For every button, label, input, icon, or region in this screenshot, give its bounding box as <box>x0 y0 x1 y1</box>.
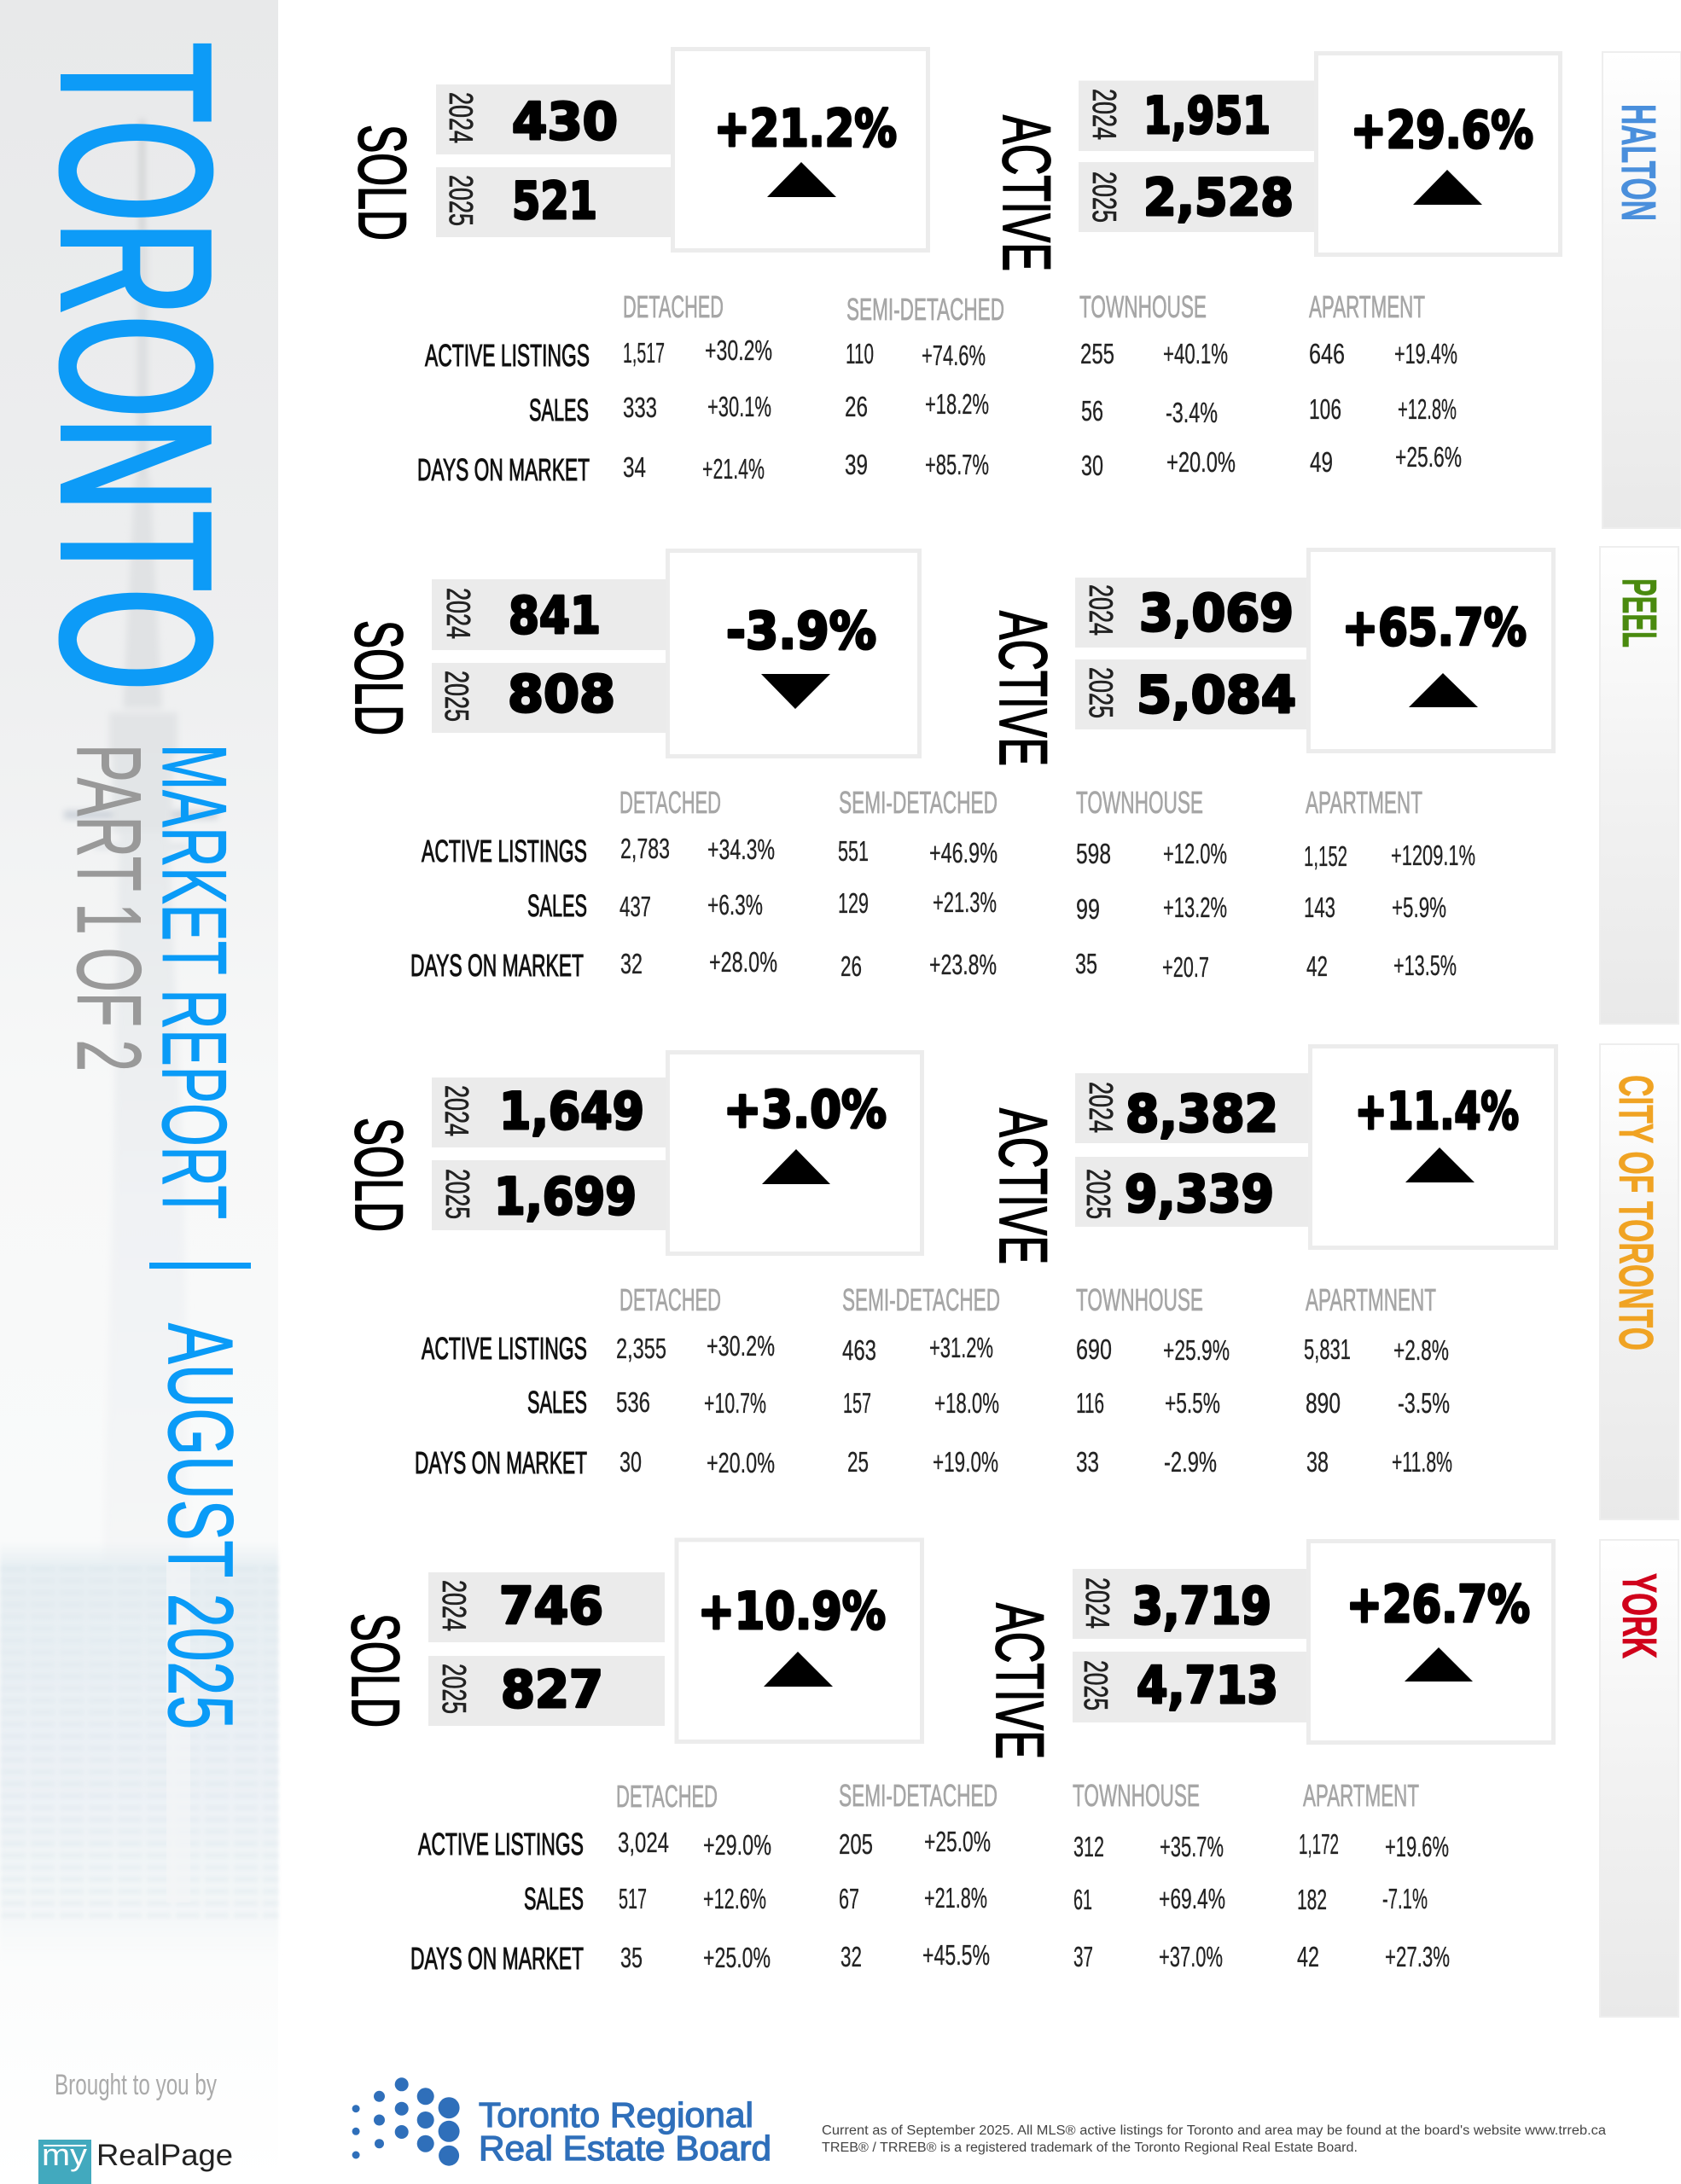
Halton active block <box>989 53 1560 271</box>
logo: myRealPage: my <box>42 2137 87 2172</box>
2024 active bar: 3,719 <box>1132 1577 1271 1636</box>
2025 sold bar: 1,699 <box>494 1167 637 1227</box>
Halton table <box>417 289 1462 487</box>
column headers: SEMI-DETACHED <box>839 785 998 820</box>
row: days on market: 37 <box>1073 1941 1093 1972</box>
row: sales: 437 <box>619 891 651 922</box>
column headers: DETACHED <box>616 1779 718 1814</box>
2025 active bar <box>1079 162 1314 232</box>
column headers: APARTMNENT <box>1306 1282 1436 1317</box>
row: days on market: +23.8% <box>929 949 997 980</box>
row: active listings: 551 <box>838 835 869 867</box>
sold change box: -3.9% <box>726 601 876 661</box>
column headers: APARTMENT <box>1303 1778 1419 1813</box>
Peel region tab <box>1600 547 1678 1024</box>
row: sales: -3.4% <box>1166 397 1218 428</box>
column headers <box>616 1778 1419 1814</box>
2024 active bar: 2024 <box>1079 1577 1115 1629</box>
active label: ACTIVE <box>982 1603 1058 1759</box>
row: active listings: +30.2% <box>707 1330 775 1362</box>
row: active listings: 646 <box>1309 338 1345 369</box>
row: sales: 536 <box>616 1386 650 1418</box>
row: active listings: 255 <box>1080 338 1114 369</box>
row: sales <box>529 388 1457 428</box>
row: active listings: 598 <box>1076 838 1111 869</box>
subtitle: date: AUGUST 2025 <box>149 1323 253 1729</box>
row: days on market: +21.4% <box>702 453 765 485</box>
row: sales: 67 <box>839 1883 859 1914</box>
York sold block <box>338 1540 922 1742</box>
sold change box: +10.9% <box>698 1582 886 1641</box>
2024 active bar <box>1079 80 1314 151</box>
row: sales: +13.2% <box>1163 892 1227 923</box>
row: sales: 99 <box>1076 893 1100 925</box>
row: active listings: +29.0% <box>703 1829 771 1861</box>
row: sales: 157 <box>843 1387 871 1419</box>
2025 sold bar: 2025 <box>442 175 479 226</box>
row: sales: +69.4% <box>1159 1883 1225 1914</box>
row: days on market: +19.0% <box>933 1446 998 1478</box>
sidebar background with faded CN Tower skyline <box>0 0 278 2184</box>
sponsor heading: Brought to you by <box>55 2069 217 2101</box>
row: days on market: 30 <box>1081 450 1103 481</box>
Halton sold block <box>345 49 928 251</box>
2025 active bar: 5,084 <box>1137 665 1296 725</box>
row: days on market: 25 <box>847 1446 869 1478</box>
panel: Halton <box>345 49 1681 528</box>
row: days on market: 33 <box>1076 1446 1099 1478</box>
row: days on market: +20.0% <box>707 1447 775 1478</box>
2024 sold bar: 841 <box>509 586 601 646</box>
row: sales: +6.3% <box>707 889 763 921</box>
row: active listings: +34.3% <box>707 834 775 865</box>
2024 sold bar: 2024 <box>438 1085 474 1136</box>
2024 active bar: 2024 <box>1082 1082 1119 1133</box>
row: active listings: +19.4% <box>1394 338 1457 369</box>
row: sales: 182 <box>1297 1884 1327 1915</box>
row: sales: SALES <box>527 1385 587 1420</box>
row: days on market: 32 <box>620 948 643 979</box>
row: sales: 56 <box>1081 395 1103 427</box>
row: active listings: +31.2% <box>929 1332 993 1363</box>
column headers: TOWNHOUSE <box>1076 785 1203 820</box>
column headers: TOWNHOUSE <box>1076 1282 1203 1317</box>
logo: myRealPage: RealPage <box>96 2139 233 2172</box>
row: active listings: +25.9% <box>1163 1334 1230 1366</box>
row: sales: +5.9% <box>1392 892 1446 923</box>
row: days on market: DAYS ON MARKET <box>415 1445 587 1480</box>
2024 sold bar: 746 <box>499 1577 603 1636</box>
row: sales: 106 <box>1309 393 1341 425</box>
2025 sold bar: 2025 <box>438 671 474 722</box>
2024 sold bar <box>432 579 666 650</box>
row: active listings <box>418 1826 1449 1862</box>
row: days on market: 32 <box>840 1941 862 1972</box>
row: days on market: 42 <box>1306 950 1328 982</box>
row: active listings: +35.7% <box>1160 1831 1224 1862</box>
column headers: SEMI-DETACHED <box>839 1778 998 1813</box>
row: sales <box>524 1881 1428 1916</box>
disclaimer text: Current as of September 2025. All MLS® active listings for Toronto and area may be found at the board's website www.trreb.ca <box>822 2123 1606 2138</box>
row: days on market: +11.8% <box>1392 1446 1452 1478</box>
row: sales: +12.8% <box>1398 393 1457 425</box>
row: days on market: +13.5% <box>1393 950 1457 981</box>
City of Toronto region tab: CITY OF TORONTO <box>1608 1075 1663 1350</box>
2025 sold bar <box>428 1656 665 1726</box>
2024 active bar: 2024 <box>1085 89 1122 140</box>
2024 sold bar: 430 <box>512 92 618 152</box>
row: days on market: 30 <box>619 1446 642 1478</box>
2025 sold bar <box>436 167 671 237</box>
row: active listings: +2.8% <box>1393 1334 1449 1366</box>
2025 active bar: 4,713 <box>1137 1656 1278 1716</box>
row: sales: 143 <box>1304 892 1335 923</box>
row: active listings: 463 <box>842 1334 876 1366</box>
sold change box <box>672 49 928 251</box>
active label: ACTIVE <box>989 115 1065 271</box>
row: days on market: 26 <box>840 950 862 982</box>
row: days on market <box>410 946 1457 983</box>
row: active listings: +1209.1% <box>1391 839 1475 871</box>
2024 active bar <box>1075 1073 1309 1144</box>
row: active listings: +46.9% <box>929 837 998 868</box>
panel: sidebar <box>0 0 278 2184</box>
row: sales: SALES <box>529 392 589 427</box>
sold change box: +3.0% <box>724 1080 887 1140</box>
panel: York <box>338 1540 1678 2017</box>
row: days on market: DAYS ON MARKET <box>417 452 590 487</box>
panel: Peel <box>341 547 1678 1024</box>
row: active listings: 2,355 <box>616 1333 666 1364</box>
column headers: DETACHED <box>623 289 724 324</box>
row: sales: +21.8% <box>924 1882 987 1914</box>
row: active listings: 5,831 <box>1304 1333 1351 1365</box>
2025 sold bar <box>432 1160 666 1230</box>
2025 sold bar: 808 <box>508 665 615 724</box>
row: sales: 61 <box>1073 1884 1092 1915</box>
sold change box <box>667 551 920 756</box>
row: active listings: +74.6% <box>922 340 986 371</box>
row: days on market <box>415 1445 1452 1480</box>
sold label: SOLD <box>341 620 417 735</box>
row: active listings: 110 <box>846 338 874 369</box>
row: sales: SALES <box>527 888 587 923</box>
row: days on market: 39 <box>845 449 868 480</box>
row: active listings <box>422 1330 1449 1366</box>
Peel region tab: PEEL <box>1612 578 1666 648</box>
Halton region tab: HALTON <box>1611 104 1666 221</box>
2024 active bar <box>1075 578 1311 648</box>
2024 sold bar <box>432 1077 666 1147</box>
2024 sold bar: 2024 <box>442 92 479 143</box>
2025 active bar: 2025 <box>1082 667 1119 718</box>
row: sales <box>527 886 1446 925</box>
York region tab <box>1600 1540 1678 2017</box>
row: sales: +30.1% <box>707 391 771 422</box>
row: sales: 333 <box>623 392 657 423</box>
sold change box <box>667 1053 922 1254</box>
2025 sold bar: 2025 <box>435 1664 472 1714</box>
row: sales: +5.5% <box>1165 1387 1220 1419</box>
row: active listings: +25.0% <box>924 1826 991 1857</box>
active change box: +29.6% <box>1351 101 1533 160</box>
row: active listings: +19.6% <box>1385 1831 1449 1862</box>
2024 active bar: 8,382 <box>1126 1084 1278 1144</box>
row: days on market: +25.6% <box>1395 441 1462 473</box>
Peel sold block <box>341 551 920 756</box>
row: days on market: +27.3% <box>1385 1941 1450 1972</box>
disclaimer text <box>822 2123 1606 2155</box>
column headers <box>619 785 1422 820</box>
row: active listings: +30.2% <box>705 334 772 366</box>
title: TORONTO: TORONTO <box>15 43 258 690</box>
row: sales: 517 <box>619 1883 647 1914</box>
2024 sold bar: 1,649 <box>499 1082 644 1141</box>
active change box: +26.7% <box>1347 1575 1530 1635</box>
2025 active bar: 2025 <box>1077 1660 1114 1711</box>
City of Toronto region tab <box>1600 1044 1678 1519</box>
row: days on market: 38 <box>1306 1446 1329 1478</box>
row: days on market: 34 <box>623 451 646 483</box>
City table <box>415 1282 1452 1480</box>
column headers: SEMI-DETACHED <box>846 292 1004 327</box>
Peel table <box>410 785 1475 983</box>
row: sales: 116 <box>1076 1387 1104 1419</box>
row: active listings: 1,172 <box>1299 1828 1339 1860</box>
City active block <box>986 1046 1556 1264</box>
row: active listings: ACTIVE LISTINGS <box>418 1827 584 1862</box>
row: active listings: ACTIVE LISTINGS <box>422 1331 587 1366</box>
row: active listings: ACTIVE LISTINGS <box>422 834 587 868</box>
column headers: DETACHED <box>619 1282 721 1317</box>
logo text: Real Estate Board <box>479 2129 771 2168</box>
row: active listings: 205 <box>839 1828 873 1860</box>
logo text <box>479 2095 771 2168</box>
row: sales: -7.1% <box>1382 1883 1428 1914</box>
2025 sold bar: 2025 <box>439 1169 475 1219</box>
disclaimer text: TREB® / TRREB® is a registered trademark of the Toronto Regional Real Estate Board. <box>822 2140 1358 2155</box>
active change box <box>1311 1046 1556 1247</box>
row: days on market: 35 <box>620 1942 643 1973</box>
row: active listings: +12.0% <box>1163 838 1227 869</box>
row: days on market: DAYS ON MARKET <box>410 1941 584 1976</box>
row: active listings: 690 <box>1076 1333 1112 1365</box>
2025 active bar: 2,528 <box>1143 168 1294 228</box>
row: days on market: DAYS ON MARKET <box>410 948 584 983</box>
2024 active bar <box>1073 1569 1306 1639</box>
row: active listings <box>422 833 1475 872</box>
column headers: TOWNHOUSE <box>1079 289 1207 324</box>
active change box <box>1316 53 1560 254</box>
row: sales: +18.2% <box>925 388 989 420</box>
row: days on market: 49 <box>1310 446 1333 478</box>
sold label: SOLD <box>345 125 421 241</box>
divider <box>149 1263 251 1269</box>
2025 active bar: 9,339 <box>1125 1165 1274 1224</box>
column headers <box>619 1282 1436 1317</box>
2024 active bar: 3,069 <box>1139 584 1294 643</box>
York active block <box>982 1541 1553 1759</box>
active change box: +11.4% <box>1355 1082 1519 1141</box>
row: active listings: 312 <box>1073 1831 1104 1862</box>
row: days on market: +28.0% <box>709 946 777 978</box>
York region tab: YORK <box>1612 1573 1666 1658</box>
active change box <box>1309 549 1553 751</box>
row: days on market: 35 <box>1075 948 1097 979</box>
logo text: Toronto Regional <box>479 2095 753 2135</box>
row: sales: +12.6% <box>703 1883 766 1914</box>
active change box: +65.7% <box>1342 598 1527 658</box>
row: sales: 129 <box>838 887 869 919</box>
column headers: APARTMENT <box>1306 785 1422 820</box>
2025 active bar: 2025 <box>1079 1169 1116 1219</box>
sold label: SOLD <box>341 1118 417 1232</box>
subtitle: part 1 of 2: PART 1 OF 2 <box>58 744 160 1072</box>
row: days on market: +85.7% <box>925 449 989 480</box>
2024 sold bar <box>428 1572 665 1642</box>
row: sales: -3.5% <box>1398 1387 1450 1419</box>
City sold block <box>341 1053 922 1254</box>
row: active listings: 3,024 <box>618 1827 669 1858</box>
row: active listings <box>425 334 1457 373</box>
row: sales: 890 <box>1306 1387 1341 1419</box>
row: sales: 26 <box>845 391 868 422</box>
York table <box>410 1778 1450 1976</box>
icon: dot cluster <box>352 2077 460 2166</box>
2024 active bar: 2024 <box>1082 584 1119 636</box>
2024 sold bar <box>436 84 671 154</box>
2024 sold bar: 2024 <box>439 588 476 639</box>
2024 sold bar: 2024 <box>435 1580 472 1631</box>
row: days on market: -2.9% <box>1164 1446 1217 1478</box>
row: sales: +21.3% <box>933 886 997 918</box>
active label: ACTIVE <box>986 611 1062 766</box>
row: active listings: 1,517 <box>623 337 665 369</box>
active change box <box>1309 1541 1553 1742</box>
2024 active bar: 1,951 <box>1143 86 1271 146</box>
2025 active bar <box>1075 1157 1309 1227</box>
sold change box <box>677 1540 922 1742</box>
2025 active bar <box>1073 1652 1306 1722</box>
logo: myRealPage <box>38 2137 233 2184</box>
column headers: DETACHED <box>619 785 721 820</box>
panel: City of Toronto <box>341 1044 1678 1519</box>
sold label: SOLD <box>338 1613 414 1728</box>
column headers: SEMI-DETACHED <box>842 1282 1000 1317</box>
2025 active bar: 2025 <box>1085 171 1122 223</box>
row: sales: +18.0% <box>934 1387 999 1419</box>
row: days on market <box>417 441 1462 487</box>
2025 active bar <box>1075 659 1311 729</box>
row: sales: SALES <box>524 1881 584 1916</box>
row: sales <box>527 1385 1450 1420</box>
column headers: APARTMENT <box>1309 289 1425 324</box>
active label: ACTIVE <box>986 1108 1062 1264</box>
2025 sold bar: 827 <box>501 1660 603 1720</box>
sold change box: +21.2% <box>714 99 897 159</box>
subtitle: market report: MARKET REPORT <box>143 744 246 1219</box>
row: active listings: 2,783 <box>620 833 670 864</box>
row: active listings: +40.1% <box>1163 338 1228 369</box>
row: days on market: +20.0% <box>1166 446 1236 478</box>
2025 sold bar <box>432 663 666 733</box>
row: days on market: +20.7 <box>1162 951 1209 983</box>
row: active listings: 1,152 <box>1304 840 1347 872</box>
row: days on market <box>410 1939 1450 1976</box>
Halton region tab <box>1602 52 1681 528</box>
row: days on market: 42 <box>1297 1941 1319 1972</box>
column headers <box>623 289 1425 327</box>
row: sales: +10.7% <box>704 1387 766 1419</box>
column headers: TOWNHOUSE <box>1073 1778 1200 1813</box>
row: days on market: +37.0% <box>1159 1941 1223 1972</box>
row: days on market: +25.0% <box>703 1942 771 1973</box>
row: days on market: +45.5% <box>922 1939 990 1971</box>
logo: Toronto Regional Real Estate Board <box>352 2077 771 2168</box>
row: active listings: ACTIVE LISTINGS <box>425 338 590 373</box>
Peel active block <box>986 549 1553 766</box>
2025 sold bar: 521 <box>512 171 597 231</box>
